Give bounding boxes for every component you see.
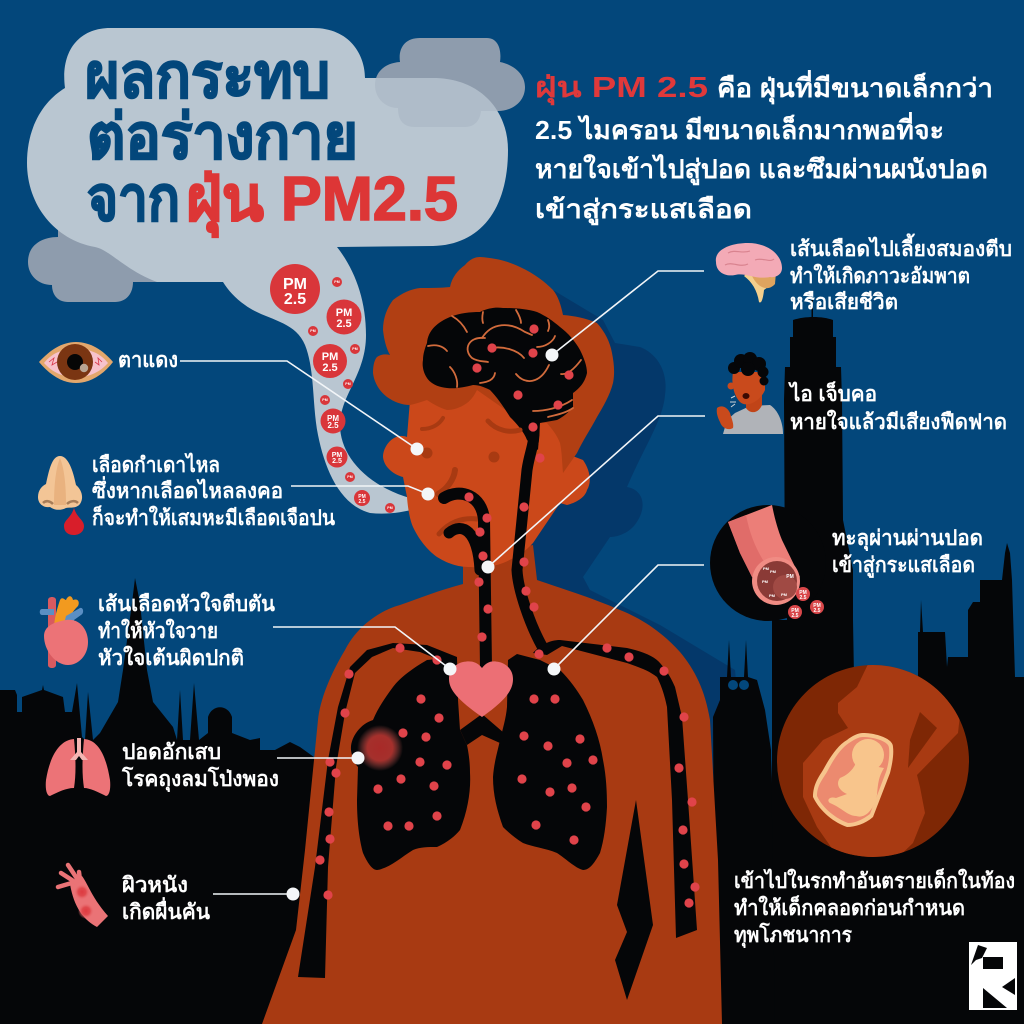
illustration: blood vessel: PM [770, 569, 777, 574]
label: skin: เกิดผื่นคัน [122, 896, 211, 924]
label: nose [92, 452, 336, 530]
PM 2.5 particles: 2.5 [332, 458, 342, 465]
illustration: blood vessel: PM [781, 592, 788, 597]
right lung [493, 654, 607, 870]
dark cloud upper right [375, 38, 525, 127]
dark cloud lower left [28, 225, 160, 302]
label: lungs: โรคถุงลมโป่งพอง [121, 766, 279, 793]
PM 2.5 particles: 2.5 [327, 421, 339, 430]
illustration: blood vessel: PM [786, 574, 794, 580]
inflamed spot [357, 725, 403, 771]
icon: lungs [46, 738, 110, 796]
title: จาก [87, 165, 180, 234]
label: nose: เลือดกำเดาไหล [92, 452, 220, 477]
label: pregnancy: ทำให้เด็กคลอดก่อนกำหนด [734, 894, 965, 920]
label: heart [98, 591, 276, 670]
label: brain: เส้นเลือดไปเลี้ยงสมองตีบ [790, 233, 1012, 261]
label: brain: ทำให้เกิดภาวะอัมพาต [790, 263, 970, 288]
body shadow [500, 290, 745, 800]
illustration: blood vessel: PM [762, 579, 769, 584]
icon: heart [40, 596, 88, 668]
face [383, 350, 590, 567]
tower antenna [812, 300, 813, 320]
label: lungs [121, 741, 279, 793]
label: skin: ผิวหนัง [121, 874, 188, 897]
intro text: คือ ฝุ่นที่มีขนาดเล็กกว่า [717, 69, 993, 105]
skyline [0, 300, 1024, 1024]
title: ผลกระทบ [85, 42, 330, 111]
label: bloodstream: ทะลุผ่านผ่านปอด [832, 527, 983, 552]
PM 2.5 particles: 2.5 [322, 362, 338, 374]
label: heart: ทำให้หัวใจวาย [98, 618, 218, 643]
label: nose: ก็จะทำให้เสมหะมีเลือดเจือปน [92, 504, 336, 530]
intro text: หายใจเข้าไปสู่ปอด และซึมผ่านผนังปอด [535, 153, 988, 186]
illustration: pregnancy [777, 660, 969, 870]
PM 2.5 particles: PM [345, 382, 351, 386]
PM 2.5 particles: PM [352, 347, 358, 351]
PM 2.5 particles: PM [334, 280, 340, 284]
label: heart: หัวใจเต้นผิดปกติ [98, 645, 244, 670]
left arm vessel [298, 643, 457, 978]
illustration: blood vessel: 2.5 [792, 613, 799, 619]
particle dots [315, 324, 700, 908]
icon: coughing person [717, 352, 783, 434]
skyline: tower [765, 317, 860, 1024]
connector lines [180, 271, 705, 894]
icon: red eye [39, 342, 113, 383]
label: brain [790, 233, 1012, 314]
title: ฝุ่น PM2.5 [186, 165, 458, 237]
PM 2.5 particles: PM [332, 452, 342, 459]
PM 2.5 particles: PM [322, 351, 338, 363]
label: heart: เส้นเลือดหัวใจตีบตัน [98, 591, 276, 616]
title [85, 42, 458, 237]
label: eye: ตาแดง [118, 349, 178, 372]
intro text [535, 69, 993, 226]
PM 2.5 particles: PM [322, 398, 328, 402]
illustration: blood vessel [710, 505, 826, 621]
brain [423, 308, 587, 450]
torso [262, 545, 722, 1024]
logo [969, 942, 1017, 1010]
PM 2.5 particles: PM [327, 414, 339, 423]
illustration: blood vessel: PM [813, 603, 821, 609]
label: cough [788, 380, 1007, 434]
PM 2.5 particles: PM [336, 307, 352, 319]
label: skin [121, 874, 211, 924]
PM 2.5 particles: PM [358, 494, 366, 500]
label: lungs: ปอดอักเสบ [122, 741, 221, 764]
illustration: blood vessel: PM [799, 590, 807, 596]
person illustration [262, 257, 722, 1024]
label: cough: ไอ เจ็บคอ [788, 380, 877, 406]
illustration: blood vessel: PM [791, 608, 799, 614]
illustration: blood vessel: PM [769, 593, 776, 598]
label: cough: หายใจแล้วมีเสียงฟืดฟาด [790, 409, 1007, 434]
icon: skin rash hand [58, 865, 108, 927]
PM 2.5 particles: 2.5 [284, 291, 306, 308]
heart [449, 661, 513, 717]
mouth and face marks [422, 418, 520, 534]
PM 2.5 particles: PM [387, 506, 393, 510]
icon: nose with blood [38, 456, 84, 535]
skyline: left of tower [713, 640, 775, 1024]
underarm gap [615, 800, 653, 1000]
label: pregnancy: ทุพโภชนาการ [734, 922, 853, 949]
PM 2.5 particles: 2.5 [359, 499, 366, 505]
label: brain: หรือเสียชีวิต [790, 290, 898, 314]
PM 2.5 particles: PM [283, 276, 307, 293]
hair [373, 257, 614, 473]
label: bloodstream [832, 527, 983, 579]
intro text: เข้าสู่กระแสเลือด [535, 194, 752, 226]
PM 2.5 particles: PM [310, 329, 316, 333]
intro text: 2.5 ไมครอน มีขนาดเล็กมากพอที่จะ [535, 111, 944, 145]
label: pregnancy [734, 867, 1015, 949]
building windows [728, 680, 749, 690]
right arm vessel [533, 640, 697, 938]
left lung [351, 657, 470, 870]
connector dots [286, 348, 560, 900]
airway and vessels [444, 425, 543, 668]
illustration: blood vessel: 2.5 [800, 595, 807, 601]
smoke cloud [27, 28, 508, 514]
brain folds [428, 310, 581, 417]
PM 2.5 particles: 2.5 [336, 318, 352, 330]
illustration: blood vessel: PM [763, 566, 770, 571]
label: bloodstream: เข้าสู่กระแสเลือด [832, 553, 975, 579]
skyline: left temples [0, 578, 318, 1024]
skyline: right buildings [850, 543, 1024, 1024]
intro text: ฝุ่น PM 2.5 [535, 72, 708, 105]
PM 2.5 particles: PM [347, 475, 353, 479]
bronchi [460, 714, 504, 745]
label: nose: ซึ่งหากเลือดไหลลงคอ [92, 475, 283, 503]
PM 2.5 particles [270, 264, 395, 513]
icon: brain [716, 243, 782, 302]
title: ต่อร่างกาย [87, 103, 358, 172]
illustration: blood vessel: 2.5 [814, 608, 821, 614]
cloud overlap tint [375, 78, 497, 127]
